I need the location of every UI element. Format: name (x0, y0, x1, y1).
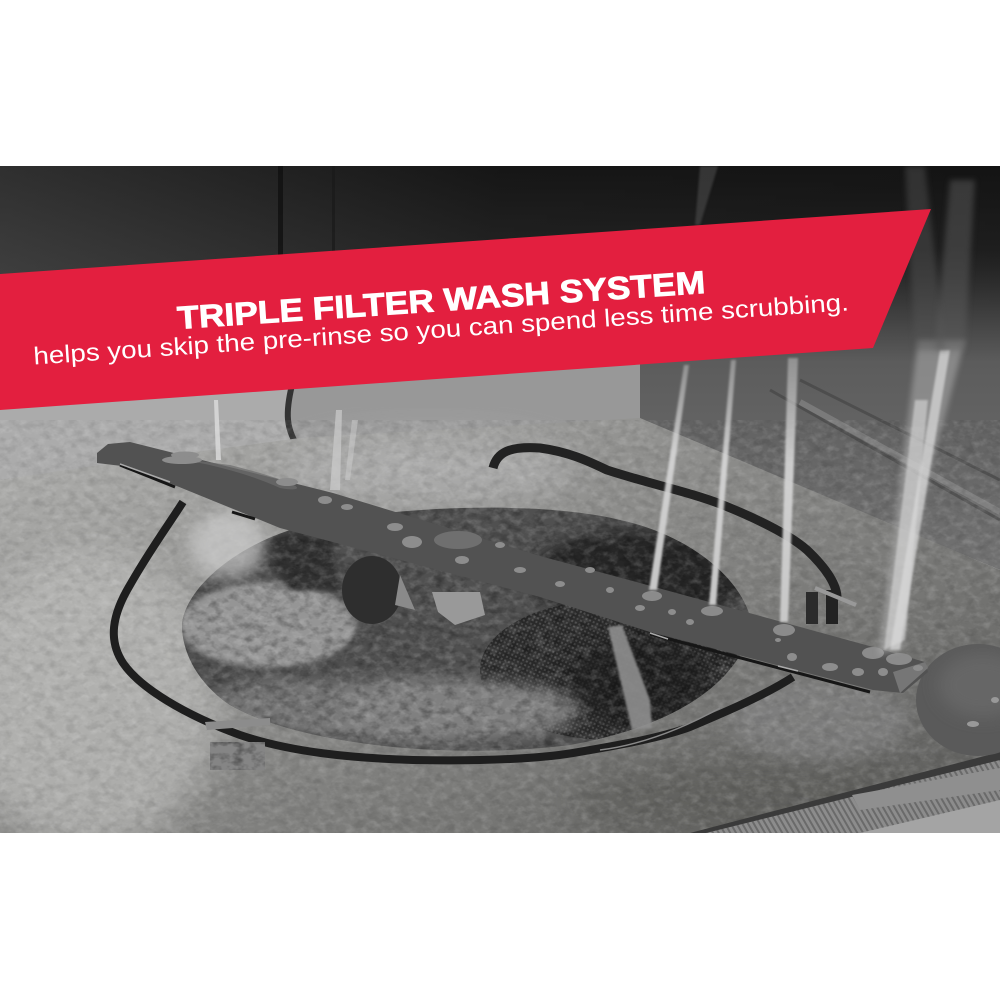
infographic (0, 166, 1000, 833)
subheading: helps you skip the pre-rinse so you can spend less time scrubbing. (33, 289, 850, 370)
dark round cap at right (916, 644, 1000, 756)
lower wall panels (0, 385, 290, 480)
wire hoop, upper (493, 448, 837, 600)
water jets (214, 166, 975, 655)
spray arm (97, 442, 928, 693)
back wall (0, 166, 1000, 570)
heading: TRIPLE FILTER WASH SYSTEM (176, 264, 706, 336)
filter parts (342, 556, 402, 624)
wire hoop, lower (114, 502, 793, 760)
bracket on hoop (806, 588, 856, 624)
hoop clip (205, 718, 270, 770)
droplets (162, 452, 923, 676)
filter basin (182, 508, 749, 751)
falling water jet (608, 625, 652, 730)
photo: dishwasher interior with filter and spray arm (0, 166, 1000, 850)
red banner (0, 209, 931, 410)
lower right tray (690, 752, 1000, 833)
nozzles (642, 591, 912, 665)
water floor (0, 418, 1000, 850)
splash at filter edge (190, 511, 266, 579)
drain tube (284, 389, 296, 440)
